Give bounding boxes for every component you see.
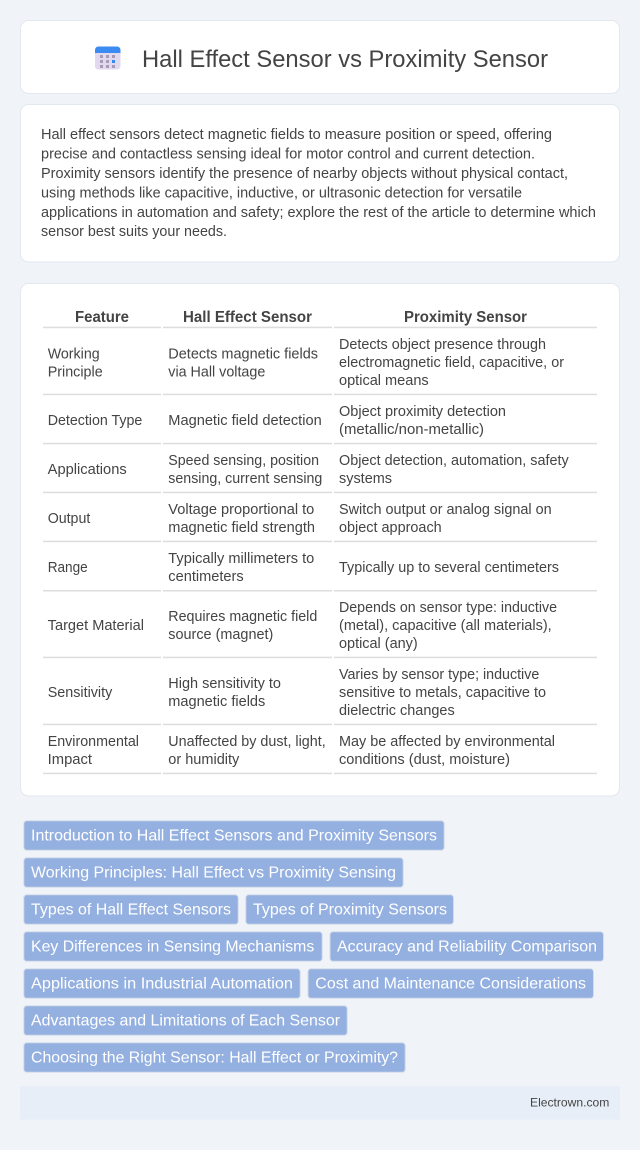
table row: output: magnetic field strength [168,520,315,536]
table row: sensitivity: magnetic fields [168,694,265,710]
table row: working principle: Detects magnetic fields [168,346,318,362]
table row: output [43,502,597,542]
panel: introduction [20,104,620,262]
tag: advantages and limitations [24,1006,347,1035]
table row: working principle: optical means [339,373,429,389]
table row: detection type: Detection Type [48,413,142,429]
text block: intro paragraph: using methods like capacitive, inductive, or ultrasonic detection for versatile [41,185,522,201]
table row: sensitivity: dielectric changes [339,703,455,719]
table row: sensitivity: High sensitivity to [168,676,281,692]
table row: target material: Depends on sensor type: inductive [339,600,557,616]
table row: output: object approach [339,520,442,536]
table row: range [43,551,597,592]
panel: title header [20,20,620,94]
table row: working principle: via Hall voltage [168,364,265,380]
table header row: Proximity Sensor [404,309,527,326]
tag: choosing the right sensor [24,1043,405,1072]
table row: range: centimeters [168,569,244,585]
table row: environmental impact: Impact [48,752,92,768]
tag: types of hall effect sensors: Types of Hall Effect Sensors [31,902,231,919]
table row: detection type: Object proximity detection [339,404,506,420]
text block: intro paragraph [41,127,596,240]
table row: target material: (metal), capacitive (all materials), [339,618,552,634]
tag: applications [24,969,300,998]
text block: intro paragraph: Proximity sensors identify the presence of nearby objects without physical contact, [41,166,568,182]
table row: working principle: Detects object presence through [339,337,546,353]
table header row [43,309,597,328]
table row: target material: optical (any) [339,636,418,652]
table row: detection type [43,404,597,444]
table row: detection type: (metallic/non-metallic) [339,422,484,438]
tag: accuracy and reliability [330,932,604,961]
table row: applications: Object detection, automation, safety [339,453,569,469]
table row: sensitivity [43,667,597,725]
tag: cost and maintenance [308,969,594,998]
tag: applications: Applications in Industrial Automation [31,976,293,993]
icon: calendar grid [95,46,120,70]
tag: types of hall effect sensors [24,895,238,924]
table header row: Feature [75,309,129,326]
tag: key differences: Key Differences in Sensing Mechanisms [31,939,314,956]
table row: detection type: Magnetic field detection [168,413,322,429]
table row: working principle: electromagnetic field, capacitive, or [339,355,564,371]
tag: key differences [24,932,322,961]
tag: working principles [24,858,403,887]
text block: intro paragraph: precise and contactless sensing ideal for motor control and current detection. [41,146,535,162]
table row: target material: Requires magnetic field [168,609,317,625]
table row: environmental impact: Unaffected by dust, light, [168,734,326,750]
table row: working principle [43,337,597,395]
table row: applications: Applications [48,462,127,478]
table row: applications [43,453,597,493]
footer: Electrown.com [530,1096,609,1110]
tag: cost and maintenance: Cost and Maintenance Considerations [315,976,586,993]
tag: types of proximity sensors: Types of Proximity Sensors [253,902,447,919]
table row: applications: Speed sensing, position [168,453,319,469]
table row: target material [43,600,597,658]
table row: working principle: Principle [48,364,103,380]
table row: environmental impact: or humidity [168,752,240,768]
text block: intro paragraph: applications in automation and safety; explore the rest of the article to determine which [41,205,596,221]
footer [20,1086,620,1120]
table row: range: Range [48,560,88,576]
table row: working principle: Working [48,346,100,362]
table row: sensitivity: Varies by sensor type; inductive [339,667,539,683]
table row: environmental impact: conditions (dust, moisture) [339,752,510,768]
table row: applications: systems [339,471,392,487]
table row: sensitivity: sensitive to metals, capacitive to [339,685,546,701]
text block: intro paragraph: sensor best suits your needs. [41,224,227,240]
table row: target material: Target Material [48,618,144,634]
tag: choosing the right sensor: Choosing the Right Sensor: Hall Effect or Proximity? [31,1050,398,1067]
panel: comparison table [20,284,620,796]
table row: output: Output [48,511,90,527]
tag: introduction [24,821,444,850]
table row: output: Switch output or analog signal on [339,502,552,518]
tag: advantages and limitations: Advantages and Limitations of Each Sensor [31,1013,341,1030]
tag: working principles: Working Principles: Hall Effect vs Proximity Sensing [31,865,396,882]
title: Hall Effect Sensor vs Proximity Sensor [142,46,548,73]
table row: environmental impact: Environmental [48,734,139,750]
table row: environmental impact: May be affected by environmental [339,734,555,750]
panel: topic tags [24,821,604,1072]
table row: sensitivity: Sensitivity [48,685,113,701]
tag: accuracy and reliability: Accuracy and Reliability Comparison [337,939,597,956]
table row: range: Typically up to several centimeters [339,560,559,576]
tag: types of proximity sensors [246,895,454,924]
table row: applications: sensing, current sensing [168,471,322,487]
tag: introduction: Introduction to Hall Effect Sensors and Proximity Sensors [31,828,437,845]
table row: target material: source (magnet) [168,627,273,643]
table row: output: Voltage proportional to [168,502,314,518]
table header row: Hall Effect Sensor [183,309,312,326]
text block: intro paragraph: Hall effect sensors detect magnetic fields to measure position or speed, offering [41,127,552,143]
table row: range: Typically millimeters to [168,551,314,567]
table row: environmental impact [43,734,597,774]
